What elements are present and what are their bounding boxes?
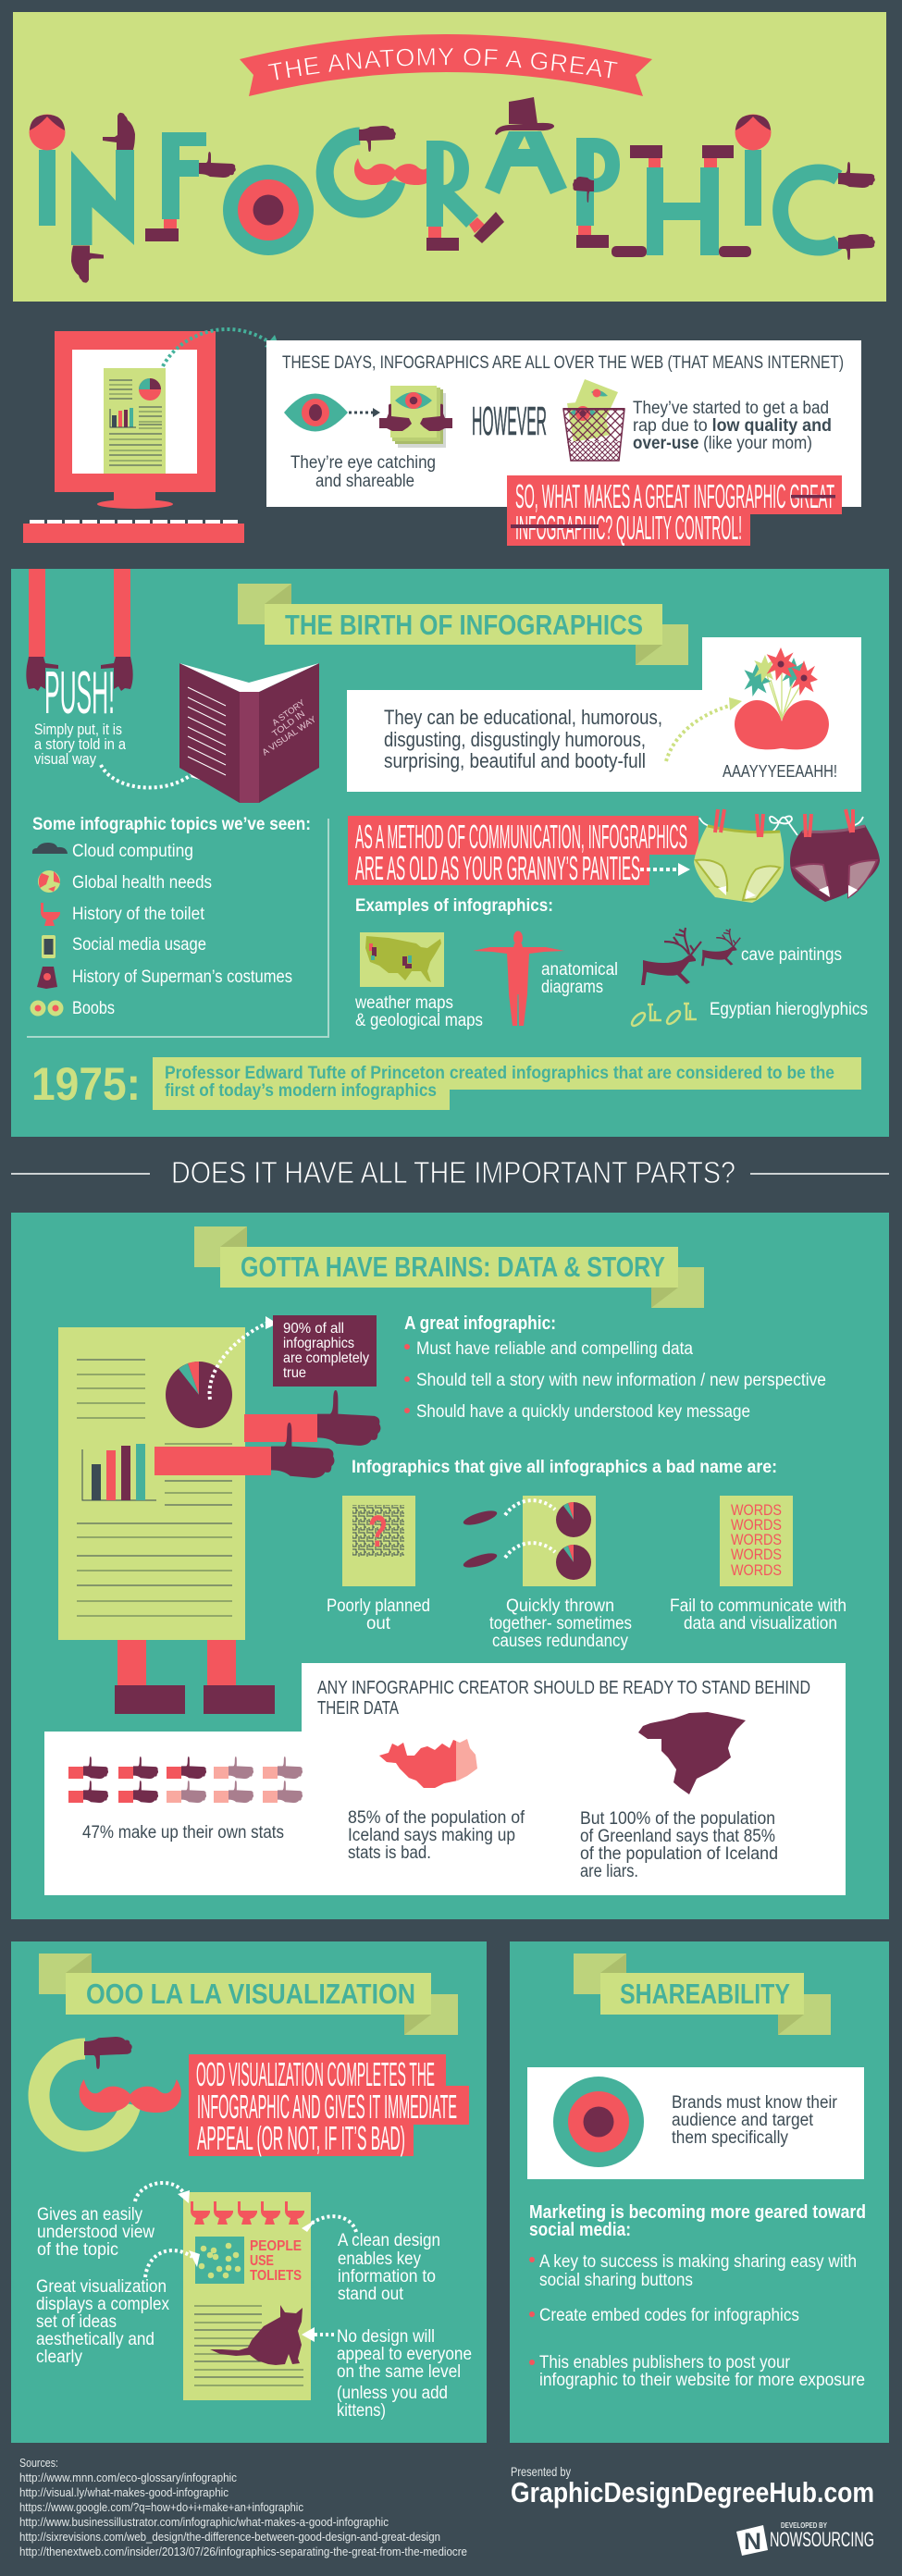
panel: intro white	[266, 340, 861, 507]
callout: good visualization: APPEAL (OR NOT, IF IT’S BAD)	[197, 2119, 405, 2157]
list: sharing tips: infographic to their website for more exposure	[539, 2371, 865, 2390]
map: Iceland: 85% of the population of	[348, 1808, 525, 1828]
heading: marketing	[529, 2202, 866, 2240]
example: cave paintings	[641, 928, 842, 985]
arm: lower	[154, 1423, 334, 1478]
icon: waste basket	[563, 379, 624, 461]
footer: presenter	[511, 2464, 874, 2508]
heading: bad name: Infographics that give all infographics a bad name are:	[352, 1458, 777, 1477]
footer: sources: http://visual.ly/what-makes-good-infographic	[19, 2485, 229, 2499]
icon: book: A VISUAL WAY	[261, 714, 319, 758]
text: clean design: information to	[338, 2267, 436, 2286]
letter O target	[223, 165, 314, 255]
text: INFOGRAPHIC AND GIVES IT IMMEDIATE	[197, 2088, 457, 2126]
icon: bouquet bum	[735, 647, 829, 749]
arrow: pie to note	[209, 1316, 278, 1399]
text: bad rap: rap due to low quality and	[633, 416, 832, 436]
text: no design	[337, 2327, 472, 2421]
heading ribbon	[574, 1954, 831, 2035]
letter A with top hat	[485, 97, 567, 194]
heading ribbon	[238, 584, 688, 665]
card: words: WORDS	[731, 1501, 782, 1519]
card: words: Fail to communicate with	[670, 1596, 846, 1616]
note: 90 percent: are completely	[283, 1350, 369, 1366]
item: superman	[37, 967, 292, 989]
arrows: visualization callouts	[135, 2183, 356, 2342]
list: topics	[30, 815, 311, 1018]
caption: eye catching: They’re eye catching	[290, 453, 436, 473]
callout: granny's panties	[348, 816, 698, 887]
heading ribbon: SHAREABILITY	[620, 1978, 790, 2010]
text: great visualization: clearly	[36, 2348, 82, 2367]
map: Iceland: stats is bad.	[348, 1843, 431, 1863]
bar chart	[82, 1444, 156, 1500]
map: Greenland: But 100% of the population	[580, 1809, 775, 1829]
heading ribbon	[39, 1954, 458, 2035]
heading ribbon: THE BIRTH OF INFOGRAPHICS	[285, 609, 643, 641]
monitor illustration	[23, 331, 244, 543]
panel: the birth of infographics	[11, 569, 889, 1137]
map: Greenland: of Greenland says that 85%	[580, 1827, 775, 1846]
panel heading	[317, 1678, 810, 1719]
text: clean design: A clean design	[338, 2231, 440, 2250]
big letter G with moustache	[39, 2037, 181, 2141]
example: cave paintings: cave paintings	[741, 945, 842, 965]
heading: marketing: social media:	[529, 2220, 631, 2240]
list: a great infographic: A great infographic:	[404, 1313, 556, 1334]
text: great visualization: aesthetically and	[36, 2330, 154, 2349]
pictogram: 47 percent	[68, 1756, 303, 1843]
text: they can be	[384, 706, 662, 772]
item: social media: Social media usage	[72, 935, 206, 955]
text: clean design	[338, 2231, 440, 2304]
card: brands: audience and target	[672, 2111, 814, 2130]
caption: eye catching	[290, 453, 436, 491]
note: 90 percent: true	[283, 1365, 306, 1381]
item: toilet: History of the toilet	[72, 905, 205, 924]
footer: sources: https://www.google.com/?q=how+do+i+make+an+infographic	[19, 2500, 303, 2514]
mini infographic: people use toilets	[183, 2192, 311, 2400]
mini infographic: people use toilets: PEOPLE	[250, 2238, 302, 2254]
caption: eye catching: and shareable	[315, 472, 414, 491]
text: great visualization: displays a complex	[36, 2295, 169, 2314]
illustration: panties on a line	[694, 809, 880, 903]
title ribbon: THE ANATOMY OF A GREAT	[268, 48, 618, 80]
panel: stand behind data	[44, 1663, 846, 1895]
title word: INFOGRAPHIC illustrated letters	[30, 97, 875, 283]
arrow: to book	[101, 764, 203, 788]
callout: good visualization	[189, 2054, 469, 2157]
heading ribbon	[194, 1226, 704, 1308]
example: weather map: weather maps	[354, 993, 453, 1013]
letter P with thumb and foot	[573, 138, 620, 248]
panel: intro white: HOWEVER	[472, 399, 547, 444]
text: they can be: They can be educational, humorous,	[384, 706, 662, 729]
heading ribbon: GOTTA HAVE BRAINS: DATA & STORY	[241, 1251, 665, 1283]
callout: quality control	[507, 475, 842, 547]
footer: presenter: Presented by	[511, 2464, 571, 2479]
card: words: WORDS	[731, 1516, 782, 1534]
card: quickly thrown together: Quickly thrown	[506, 1596, 614, 1616]
footer: developer logo	[736, 2521, 874, 2556]
callout: Tufte: first of today’s modern infographics	[165, 1081, 437, 1101]
footer: sources: http://www.mnn.com/eco-glossary/infographic	[19, 2471, 237, 2484]
text: no design: kittens)	[337, 2401, 386, 2421]
map: Iceland	[348, 1739, 525, 1863]
text: easily understood	[37, 2205, 154, 2260]
panel: shareability	[510, 1941, 889, 2443]
arms pushing	[26, 569, 133, 691]
example: hieroglyphics	[630, 1000, 868, 1028]
text: simply put: Simply put, it is	[34, 721, 122, 738]
plum panty	[790, 825, 880, 902]
text: great visualization	[36, 2277, 169, 2367]
example: anatomical diagram: diagrams	[541, 978, 603, 997]
item: cloud computing: Cloud computing	[72, 842, 193, 861]
panel: the birth of infographics: PUSH!	[44, 659, 115, 726]
text: no design: No design will	[337, 2327, 435, 2347]
item: global health: Global health needs	[72, 873, 212, 893]
card: brands: Brands must know their	[672, 2093, 838, 2113]
text: great visualization: Great visualization	[36, 2277, 167, 2297]
heading: marketing: Marketing is becoming more geared toward	[529, 2202, 866, 2223]
item: superman: History of Superman’s costumes	[72, 968, 292, 987]
item: boobs	[30, 999, 115, 1018]
example: weather map	[354, 932, 483, 1030]
year: 1975: 1975:	[31, 1058, 141, 1110]
text: great visualization: set of ideas	[36, 2312, 117, 2332]
card: words: WORDS	[731, 1561, 782, 1579]
divider heading: DOES IT HAVE ALL THE IMPORTANT PARTS?	[171, 1155, 735, 1189]
arm: upper	[244, 1390, 380, 1446]
arrow: monitor to panel	[163, 329, 280, 366]
text: no design: (unless you add	[337, 2384, 448, 2403]
text: no design: on the same level	[337, 2362, 461, 2382]
list: a great infographic: Should tell a story with new information / new perspective	[416, 1371, 826, 1390]
example: anatomical diagram: anatomical	[541, 960, 618, 980]
letter F with thumb and foot	[145, 132, 236, 241]
icon: cat	[210, 2305, 303, 2365]
panel heading: THEIR DATA	[317, 1698, 399, 1719]
pie chart	[166, 1362, 232, 1428]
text: bad rap: over-use (like your mom)	[633, 434, 812, 453]
text: they can be: surprising, beautiful and booty-full	[384, 749, 646, 772]
footer: developer logo: N	[744, 2529, 761, 2555]
item: global health	[38, 870, 212, 893]
icon: held document	[379, 386, 452, 448]
text: they can be: disgusting, disgustingly humorous,	[384, 728, 646, 751]
card: brands: them specifically	[672, 2128, 788, 2148]
map: Greenland: are liars.	[580, 1862, 638, 1881]
mini infographic: people use toilets: USE	[250, 2253, 274, 2269]
text: simply put	[34, 721, 126, 768]
text: easily understood: of the topic	[37, 2240, 118, 2260]
panel: header	[13, 12, 886, 302]
text: bad rap: They’ve started to get a bad	[633, 399, 829, 418]
letter I with head	[30, 115, 65, 226]
panel: brains data and story	[11, 1213, 889, 1919]
map: Greenland: of the population of Iceland	[580, 1844, 778, 1864]
card: words: WORDS	[731, 1531, 782, 1548]
list: a great infographic	[404, 1313, 826, 1422]
letter C with thumbs	[781, 162, 875, 260]
mini infographic: people use toilets: TOLIETS	[250, 2268, 302, 2284]
heading ribbon: OOO LA LA VISUALIZATION	[86, 1978, 415, 2010]
text: easily understood: Gives an easily	[37, 2205, 142, 2225]
mini infographic on screen	[104, 368, 166, 474]
list: sharing tips: A key to success is making sharing easy with	[539, 2252, 857, 2272]
note: 90 percent: 90% of all	[283, 1321, 344, 1337]
letter H upside-down legs	[612, 145, 751, 257]
note: 90 percent: infographics	[283, 1336, 354, 1351]
item: boobs: Boobs	[72, 999, 115, 1018]
panel: visualization	[11, 1941, 487, 2443]
card: words	[670, 1496, 846, 1633]
panel: booty-full callout	[347, 637, 861, 792]
character: document person	[58, 1327, 380, 1714]
note: 90 percent	[273, 1315, 377, 1387]
list: a great infographic: Should have a quickly understood key message	[416, 1402, 750, 1422]
arrow: to panties	[640, 863, 690, 876]
letter N with hands	[71, 113, 135, 283]
example: weather map: & geological maps	[355, 1011, 483, 1030]
title ribbon	[240, 34, 652, 96]
card: words: data and visualization	[684, 1614, 837, 1633]
footer: developer logo: DEVELOPED BY	[781, 2521, 828, 2530]
icon: book: TOLD IN	[270, 709, 307, 739]
card: brands	[527, 2067, 864, 2179]
card: poorly planned: Poorly planned	[327, 1596, 430, 1616]
list: sharing tips: social sharing buttons	[539, 2271, 693, 2290]
card: poorly planned: out	[366, 1614, 391, 1633]
map: Iceland: Iceland says making up	[348, 1826, 515, 1845]
icon: book: A STORY	[270, 697, 307, 728]
example: hieroglyphics: Egyptian hieroglyphics	[710, 1000, 868, 1019]
card: quickly thrown together	[462, 1496, 632, 1651]
text: easily understood: understood view	[37, 2223, 154, 2242]
icon: eye	[284, 394, 348, 431]
text: OOD VISUALIZATION COMPLETES THE	[196, 2055, 435, 2093]
item: toilet	[41, 903, 205, 926]
letter R with leg	[426, 141, 504, 251]
footer: sources: Sources:	[19, 2456, 58, 2470]
item: social media	[42, 935, 206, 958]
icon: book	[179, 663, 319, 803]
footer: sources	[19, 2456, 467, 2558]
heading: examples: Examples of infographics:	[355, 896, 553, 916]
callout: Tufte: Professor Edward Tufte of Princeton created infographics that are considered to be the	[165, 1064, 834, 1083]
list: sharing tips: Create embed codes for infographics	[539, 2306, 799, 2325]
footer: sources: http://www.businessillustrator.com/infographic/what-makes-a-good-infographic	[19, 2515, 389, 2529]
text: simply put: visual way	[34, 750, 96, 768]
footer: sources: http://thenextweb.com/insider/2013/07/26/infographics-separating-the-great-from-the-mediocre	[19, 2545, 467, 2558]
text: no design: appeal to everyone	[337, 2345, 472, 2364]
arrow: eye to doc	[349, 408, 380, 417]
letter I with head	[735, 115, 772, 226]
text: clean design: stand out	[338, 2285, 404, 2304]
callout: Tufte	[153, 1057, 861, 1110]
list: a great infographic: Must have reliable and compelling data	[416, 1339, 693, 1359]
text: clean design: enables key	[338, 2249, 421, 2269]
card: poorly planned	[327, 1496, 430, 1633]
card: poorly planned: ?	[368, 1508, 388, 1557]
pictogram: 47 percent: 47% make up their own stats	[82, 1823, 284, 1843]
caption: ayyy: AAAYYYEEAAHH!	[723, 762, 837, 781]
footer: sources: http://sixrevisions.com/web_design/the-difference-between-good-design-and-great-design	[19, 2530, 440, 2544]
card: words: WORDS	[731, 1546, 782, 1563]
letter G with moustache	[325, 126, 436, 209]
map: Greenland	[580, 1712, 778, 1881]
list: sharing tips	[529, 2252, 865, 2390]
list: sharing tips: This enables publishers to post your	[539, 2353, 791, 2373]
text: simply put: a story told in a	[34, 735, 126, 753]
arrow: to bouquet	[666, 697, 742, 761]
card: quickly thrown together: causes redundancy	[492, 1632, 628, 1651]
lime panty	[694, 825, 784, 903]
example: anatomical diagram	[473, 931, 618, 1026]
text: bad rap	[633, 399, 832, 453]
card: quickly thrown together: together- sometimes	[489, 1614, 632, 1633]
list heading: Some infographic topics we’ve seen:	[32, 815, 311, 834]
